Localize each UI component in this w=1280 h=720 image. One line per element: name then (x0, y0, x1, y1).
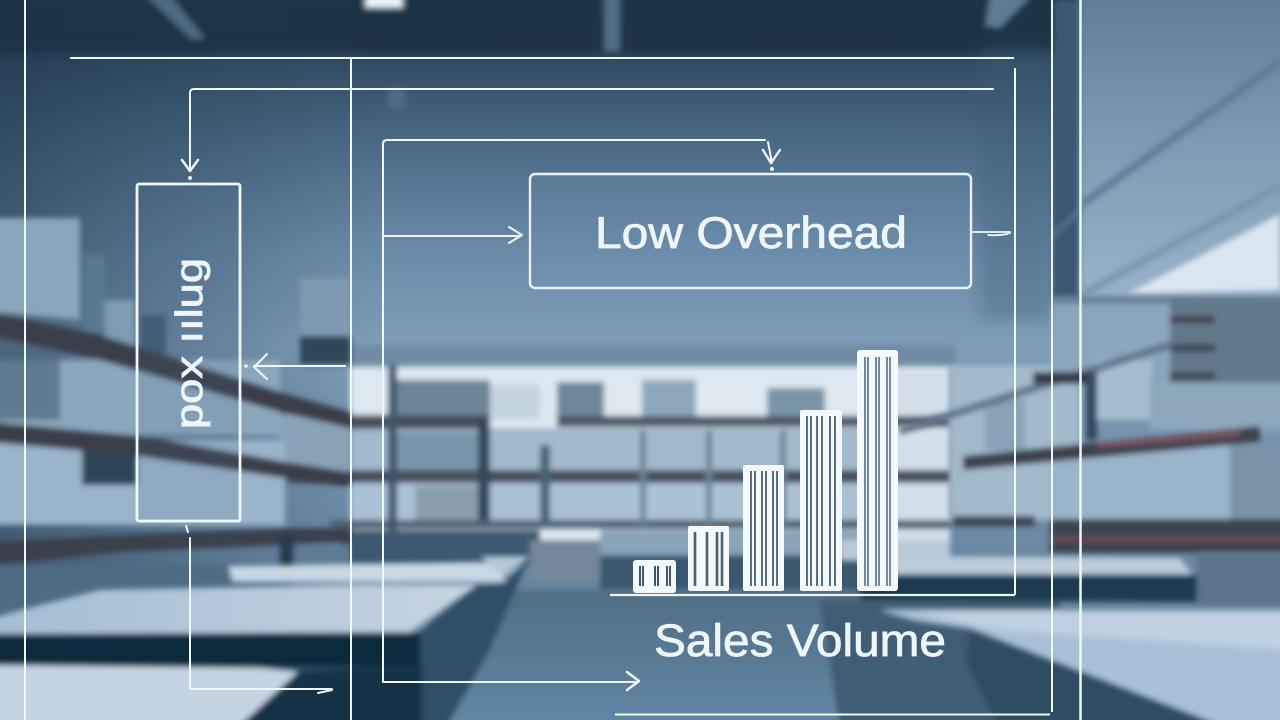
floor and tables (0, 553, 1280, 720)
label: rotated box text: pox ıılug (169, 258, 211, 429)
bar 5 (857, 350, 898, 591)
bar chart: sales volume rising (610, 350, 1015, 595)
left shelves (0, 218, 350, 615)
bar 2 (688, 526, 729, 591)
arrow: centre branch into Low Overhead side (384, 227, 522, 243)
arrow: centre branch to Sales Volume (384, 672, 639, 690)
label: Sales Volume: Sales Volume (654, 615, 946, 666)
axis line (610, 594, 1015, 596)
arrow: top line into rotated box (182, 89, 993, 179)
arrow: centre branch top into Low Overhead (383, 140, 780, 682)
arrow: Low Overhead to right line (973, 232, 1010, 235)
arrow: below vertical box (186, 526, 332, 693)
right shelves (900, 296, 1280, 553)
bar 1 (633, 560, 676, 593)
bar 3 (743, 465, 784, 591)
panel: vertical rotated box (137, 184, 240, 521)
arrow: into vertical box from centre line (245, 354, 345, 379)
bar 4 (800, 410, 842, 591)
back wall and shelves (285, 345, 955, 591)
panel: Low Overhead (530, 174, 971, 288)
heading: Low Overhead: Low Overhead (595, 209, 907, 258)
